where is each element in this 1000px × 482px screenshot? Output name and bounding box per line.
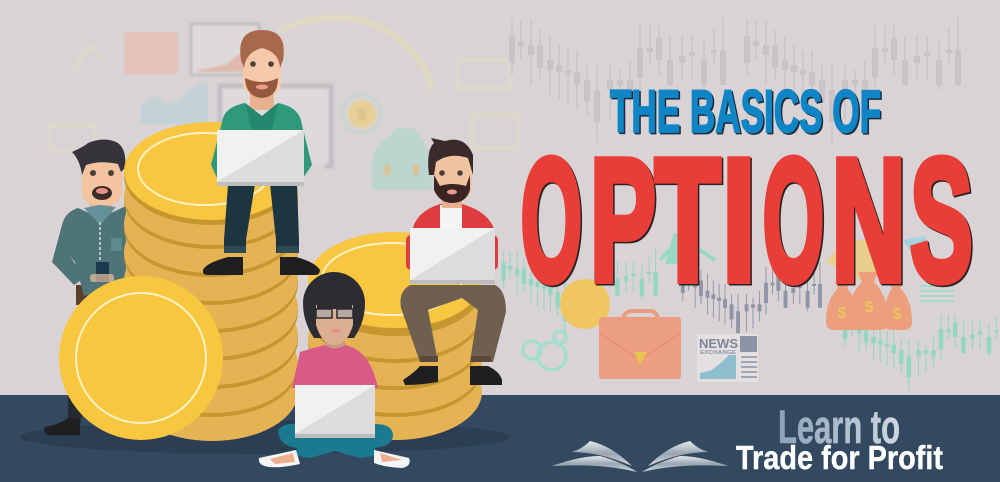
money bags: $ [838,305,847,322]
title: options: N [832,122,906,317]
faded dollar coin: $ [358,107,367,124]
faded background icons [50,17,518,190]
logo text: learn to: Learn to [778,400,900,453]
title: options: T [656,124,722,318]
teal candlestick chart right [845,309,1000,391]
news icon [697,334,758,382]
money bags: $ [865,299,874,316]
floor shadow [20,420,510,454]
person: woman in pink shirt [259,272,410,468]
logo text: trade for profit: Trade for Profit [736,439,943,476]
gray candlestick chart [512,17,958,143]
person: man in green shirt [203,30,320,275]
title: options: I [724,124,757,318]
title: options: T [655,122,720,317]
title: options: P [590,122,656,317]
faded briefcase [124,32,178,74]
coin stack: left [124,122,298,441]
faded large monitor frame [220,86,331,166]
money bags [826,272,912,330]
money bags: $ [893,306,902,323]
person: man in red jacket [400,138,506,385]
teal candlestick chart left [504,250,656,335]
title: options: I [722,122,756,317]
logo: book [552,441,728,472]
title: options: P [592,124,658,318]
news icon: EXCHANGE [700,350,737,356]
faded yellow icons [50,45,518,150]
yellow and blue shapes behind letters [826,236,932,280]
gray-blue candlestick chart [683,262,820,347]
title: options: O [522,124,584,318]
briefcase [599,311,681,379]
gears icon [523,331,566,370]
faded area chart [141,82,208,124]
title: options [521,122,974,318]
teal plant icon [660,235,715,262]
subtitle: the basics of [610,78,882,146]
coin: large front [59,276,223,440]
title: options: O [521,122,582,317]
faded monitor [191,24,259,75]
title: options: O [763,122,824,317]
faded dollar coin [343,95,381,133]
yellow circle [560,279,610,329]
floor band [0,395,1000,482]
title: options: O [764,124,826,318]
faded yellow arc arrow [280,17,432,90]
person: man in teal shirt [44,140,126,435]
coin stack: right [308,232,482,440]
news icon: NEWS [699,336,738,351]
teal document lines [920,286,954,301]
title: options: N [833,124,907,318]
faded money bags [372,128,432,190]
